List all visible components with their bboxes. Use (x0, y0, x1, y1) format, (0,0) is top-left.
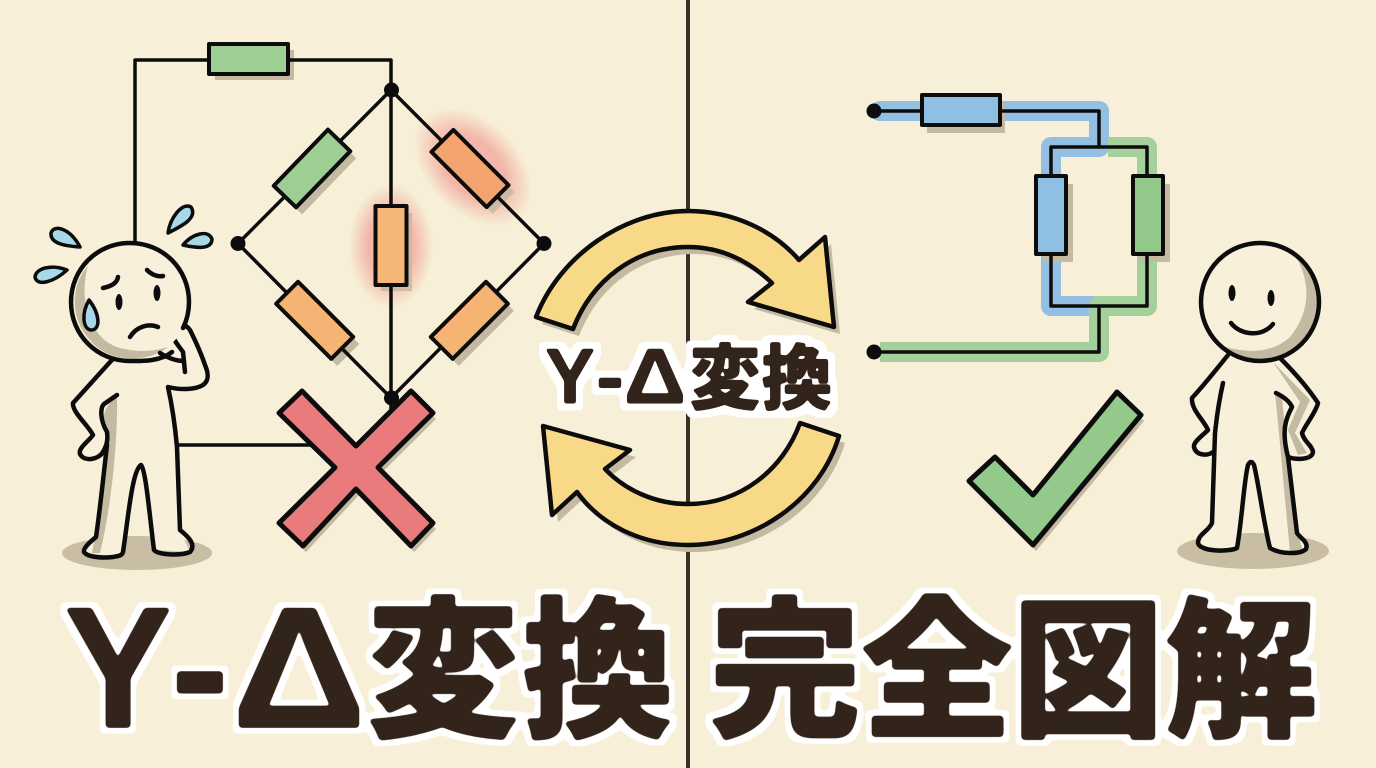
body shading (92, 397, 117, 553)
circuit wires (874, 111, 1147, 352)
tear drop on face (84, 300, 98, 330)
resistor: upper left green (274, 130, 350, 207)
figure: happy person (1177, 243, 1329, 569)
icon: green check mark (969, 392, 1144, 551)
icon: red cross (279, 391, 436, 552)
title: 完全図解 (709, 588, 1317, 758)
sweat drops (35, 206, 212, 282)
circuit wires (135, 60, 544, 445)
arrow label: 変換 (689, 340, 833, 420)
resistor drop shadows (927, 103, 1170, 262)
panel: simplified circuit (866, 95, 1170, 360)
head (71, 243, 189, 361)
resistor: center orange (376, 206, 406, 285)
resistor: top green (209, 44, 288, 74)
figure: worried person (35, 206, 212, 570)
arrow label: Y (545, 332, 595, 420)
face (103, 270, 163, 337)
red glow highlights (349, 85, 555, 308)
head (1201, 243, 1319, 361)
circuit nodes (230, 82, 552, 406)
title (64, 572, 1317, 764)
center divider line (686, 0, 690, 768)
body shading (1273, 362, 1310, 552)
blue path highlight (880, 111, 1099, 306)
arrow label: - (596, 332, 624, 420)
body outline (73, 324, 208, 557)
arrow label (545, 332, 833, 420)
body fill (1192, 355, 1318, 553)
face (1228, 285, 1274, 333)
resistor: blue vertical (1036, 176, 1066, 254)
resistor: green vertical (1133, 176, 1163, 254)
body outline (1192, 355, 1318, 553)
green path highlight (880, 147, 1147, 352)
resistor: lower left orange (276, 282, 353, 359)
resistor: upper right orange (431, 130, 509, 207)
panel: complicated bridge circuit (135, 44, 555, 445)
resistor: blue top (922, 95, 1000, 125)
body fill (73, 330, 208, 557)
arrows: conversion cycle (536, 211, 845, 552)
title: Y (64, 572, 172, 764)
ground shadow (1177, 533, 1329, 569)
resistor: lower right orange (431, 282, 508, 359)
hand at chin (160, 353, 184, 361)
resistor drop shadows (215, 50, 515, 366)
arrow label: Δ (624, 332, 686, 420)
ground shadow (62, 536, 212, 570)
title: Δ (232, 572, 366, 764)
title: 変換 (367, 588, 674, 758)
title: - (171, 572, 229, 764)
nodes (866, 104, 882, 360)
